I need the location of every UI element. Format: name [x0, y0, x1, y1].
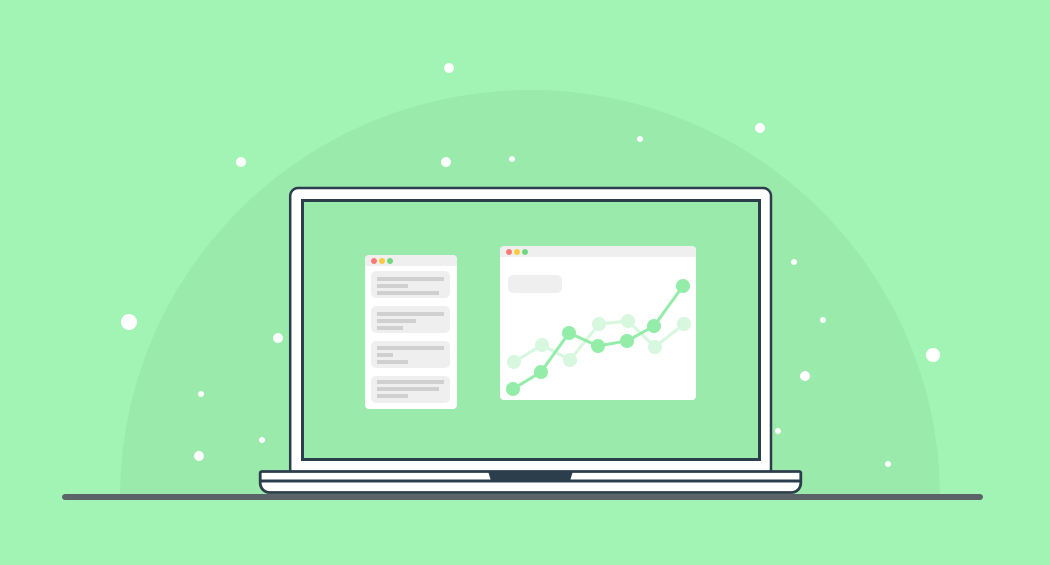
window title bar [365, 255, 457, 266]
laptop base [260, 472, 801, 492]
laptop [260, 188, 801, 492]
window control dots [371, 258, 393, 264]
window body [365, 255, 457, 409]
floating white dots [121, 63, 940, 467]
list card 2 [371, 306, 450, 333]
ground line [62, 494, 983, 500]
primary line series [506, 279, 690, 396]
chart title placeholder [508, 275, 562, 293]
panel: list window [365, 255, 457, 409]
trackpad notch [488, 471, 573, 481]
secondary line series [507, 314, 691, 369]
panel: chart window [500, 246, 696, 400]
window control dots [506, 249, 528, 255]
window body [500, 246, 696, 400]
laptop screen [302, 200, 760, 460]
list card 4 [371, 376, 450, 403]
list card 1 [371, 271, 450, 298]
list card 3 [371, 341, 450, 368]
background dome [120, 90, 940, 497]
laptop lid [290, 188, 771, 472]
window title bar [500, 246, 696, 257]
base divider [260, 480, 801, 482]
